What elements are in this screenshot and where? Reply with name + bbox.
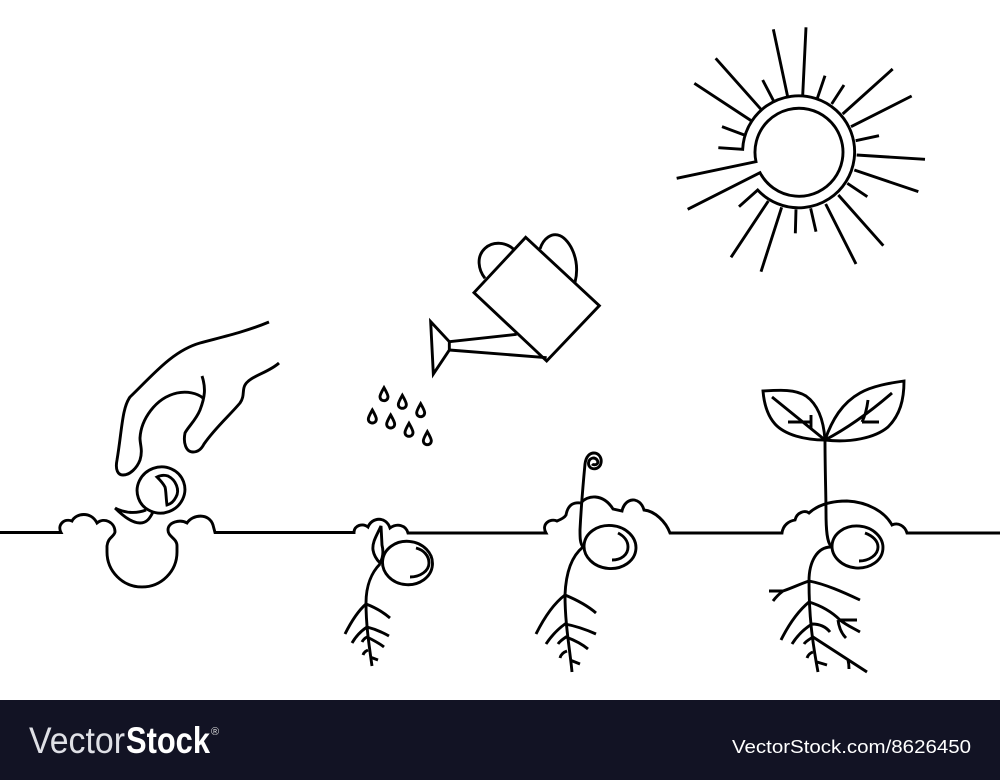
ground line with soil mounds (0, 497, 1000, 587)
watering can (431, 235, 599, 374)
hand outline (116, 322, 279, 475)
sun rays (694, 27, 925, 272)
footer logo (29, 720, 210, 761)
shoot bud (373, 526, 383, 563)
stage 2: germinating seed (345, 526, 434, 666)
water drops (368, 388, 431, 445)
sun rings (718, 96, 855, 208)
stage 3: sprout with curl (536, 453, 638, 672)
seed falling (115, 460, 191, 523)
footer bar (0, 700, 1000, 780)
stage 4: seedling with leaves (763, 381, 904, 672)
root system (769, 547, 867, 672)
seed (582, 523, 638, 571)
curled stem (580, 453, 601, 547)
can body (474, 237, 599, 361)
stem (825, 440, 831, 546)
seed (830, 524, 885, 570)
seed (381, 539, 434, 587)
registered mark: ® (211, 726, 219, 738)
footer image id: VectorStock.com/8626450 (732, 736, 971, 757)
footer logo: Vector (29, 720, 125, 761)
handles (479, 235, 577, 282)
left leaf (763, 390, 825, 440)
sun (677, 27, 925, 272)
root (345, 564, 390, 666)
root (536, 547, 596, 672)
footer logo: Stock (126, 720, 210, 761)
stage 1: hand dropping seed (115, 322, 279, 523)
right leaf (825, 381, 904, 441)
spout (431, 322, 547, 374)
